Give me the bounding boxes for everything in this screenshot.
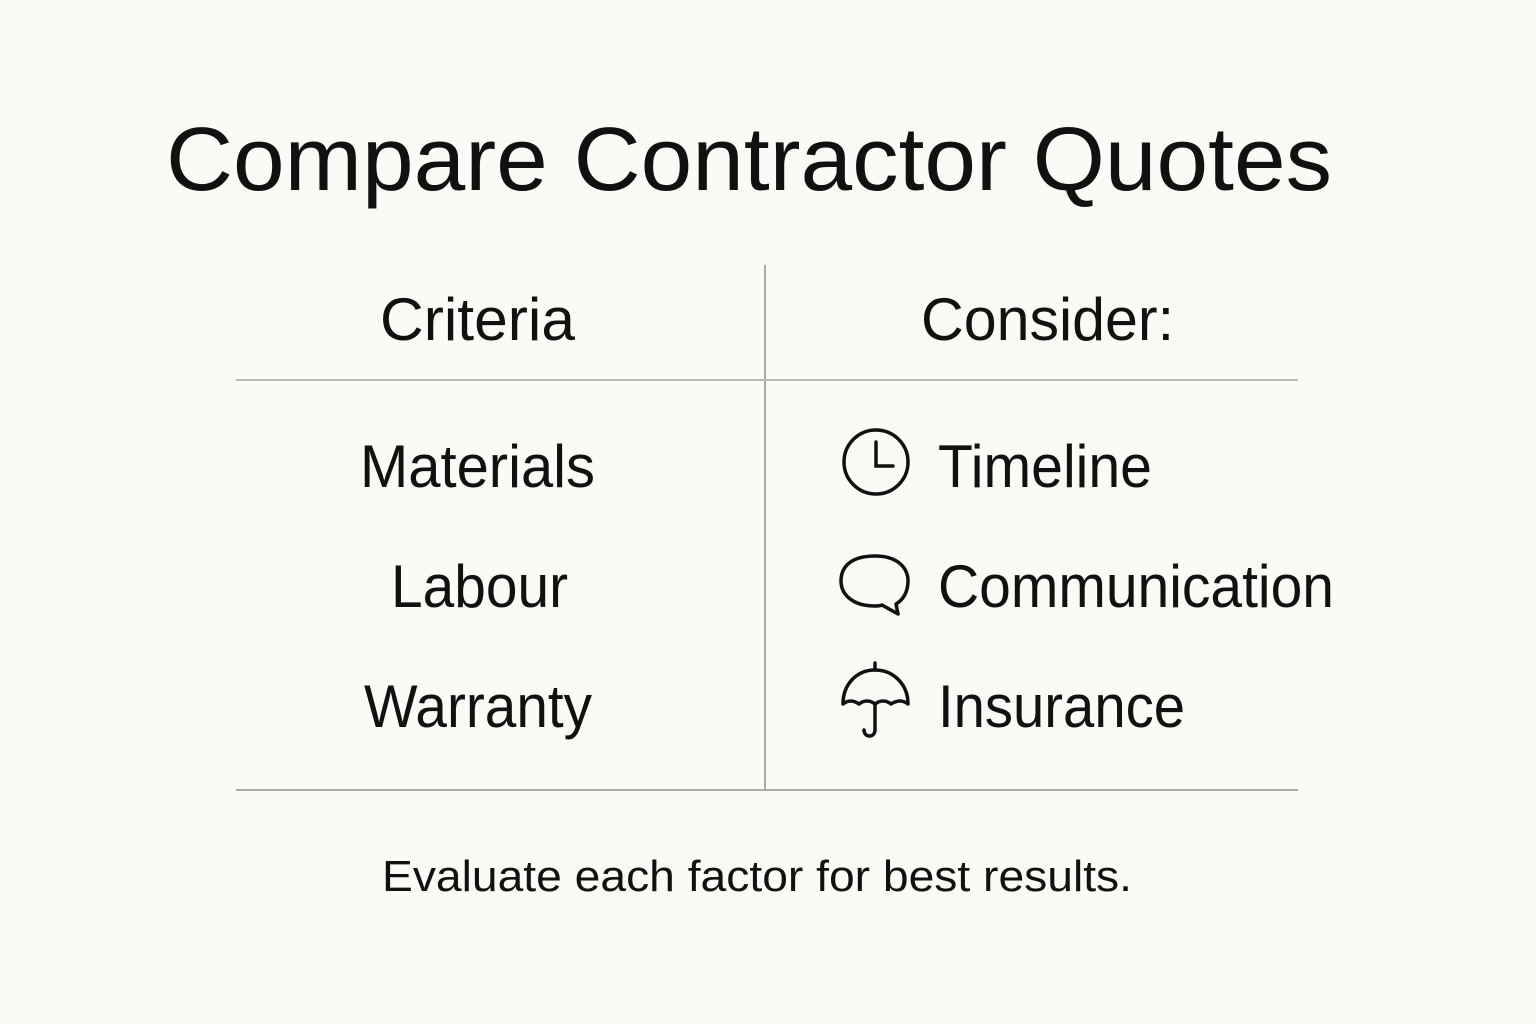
icon: speech bubble bbox=[841, 556, 908, 614]
criteria list: Materials bbox=[360, 433, 595, 500]
title: Compare Contractor Quotes bbox=[166, 110, 1332, 210]
header: consider: Consider: bbox=[921, 286, 1174, 353]
timeline: Timeline bbox=[938, 433, 1152, 500]
criteria list bbox=[360, 433, 595, 740]
insurance: Insurance bbox=[938, 673, 1185, 740]
icon: clock bbox=[844, 430, 908, 494]
header: criteria: Criteria bbox=[380, 286, 576, 353]
criteria list: Warranty bbox=[364, 673, 592, 740]
communication: Communication bbox=[938, 553, 1334, 620]
icon: umbrella bbox=[843, 663, 908, 736]
footer note: Evaluate each factor for best results. bbox=[382, 852, 1132, 901]
table bbox=[236, 265, 1334, 790]
criteria list: Labour bbox=[391, 553, 568, 620]
